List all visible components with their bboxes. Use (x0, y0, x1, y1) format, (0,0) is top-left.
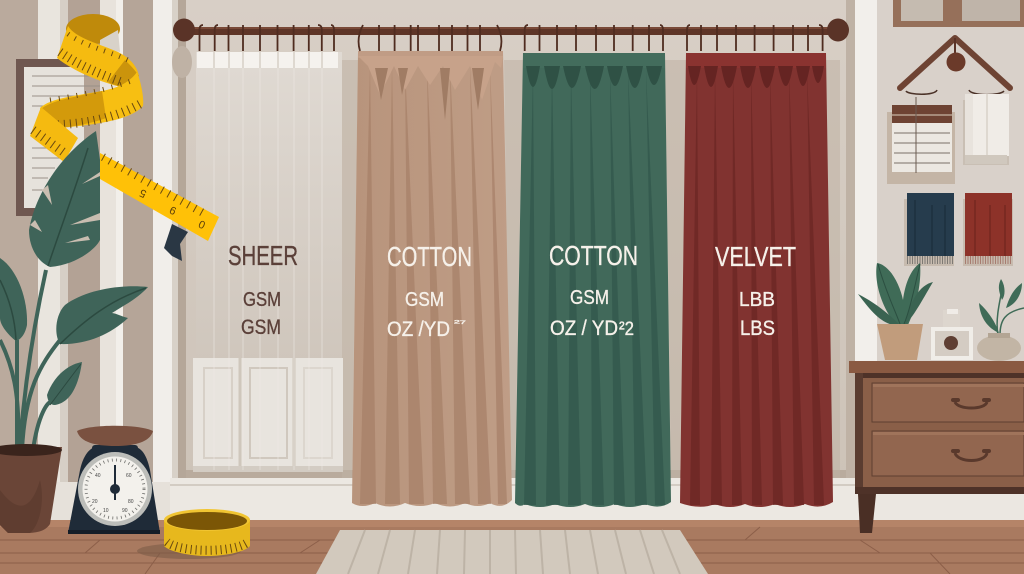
label: green cotton: COTTON (549, 240, 638, 271)
label: velvet: LBS (740, 317, 775, 340)
weighing scale: 80 (128, 499, 134, 505)
vase with sprig (977, 279, 1024, 361)
weighing scale: 20 (92, 499, 98, 505)
label: sheer: GSM (241, 316, 281, 339)
label: tan cotton: OZ /YD (387, 318, 450, 341)
panel: green cotton curtain (515, 53, 671, 507)
navy swatch (904, 193, 954, 266)
upper band (57, 26, 139, 88)
label: velvet: LBB (739, 289, 775, 311)
weighing scale: 10 (103, 508, 109, 514)
label: sheer: SHEER (228, 240, 298, 271)
label: sheer: GSM (243, 289, 281, 311)
drawer: lower (872, 431, 1024, 476)
dresser leg (858, 494, 876, 533)
label: tan cotton: ²⁷ (454, 318, 466, 328)
label: green cotton: OZ / YD (550, 317, 618, 340)
tape loop opening (66, 14, 120, 44)
left band (30, 107, 78, 162)
rug (316, 530, 708, 574)
wall frame with paper (16, 59, 100, 216)
coiled tape (137, 509, 250, 559)
drawer: upper (872, 383, 1024, 422)
measuring tape (30, 14, 219, 261)
ledger swatch card (887, 97, 955, 184)
middle band (40, 72, 143, 128)
weighing scale: 60 (126, 473, 132, 479)
plant on dresser (858, 263, 933, 360)
leaf: right tip (56, 286, 148, 344)
label: green cotton: GSM (570, 287, 609, 309)
panel: sheer curtain (193, 52, 343, 472)
weighing scale (68, 426, 160, 534)
floor (0, 520, 1024, 574)
plant with large leaves (0, 131, 148, 533)
see-through door panels (193, 358, 343, 472)
weighing scale: 90 (122, 508, 128, 514)
label: green cotton (549, 240, 638, 340)
pot (0, 447, 62, 533)
red swatch (963, 193, 1013, 266)
dresser (849, 361, 1024, 533)
label: green cotton: ²2 (619, 319, 634, 340)
label: tan cotton: GSM (405, 289, 444, 311)
hanger (900, 38, 1010, 95)
measuring tape: 9 (168, 203, 178, 217)
window frame (893, 0, 1024, 27)
measuring tape: 0 (197, 217, 207, 231)
measuring tape: 5 (138, 186, 148, 200)
label: sheer (228, 240, 298, 339)
label: velvet (715, 241, 796, 340)
header and folds (197, 52, 338, 68)
straight band (100, 153, 219, 241)
fabric (196, 52, 342, 472)
white swatch (963, 94, 1009, 165)
tape clip (164, 224, 188, 261)
leaf: large top (29, 131, 100, 267)
weighing scale: 40 (95, 473, 101, 479)
leaf: left (0, 258, 27, 341)
curtain rings (200, 25, 823, 51)
label: tan cotton: COTTON (387, 241, 472, 272)
label: velvet: VELVET (715, 241, 796, 272)
panel: red velvet curtain (680, 53, 833, 507)
panel: tan cotton curtain (352, 51, 512, 506)
curtain rod (173, 18, 849, 42)
white box on dresser (931, 309, 973, 360)
label: tan cotton (387, 241, 472, 341)
stems (0, 270, 60, 450)
leaf: small (47, 362, 82, 405)
